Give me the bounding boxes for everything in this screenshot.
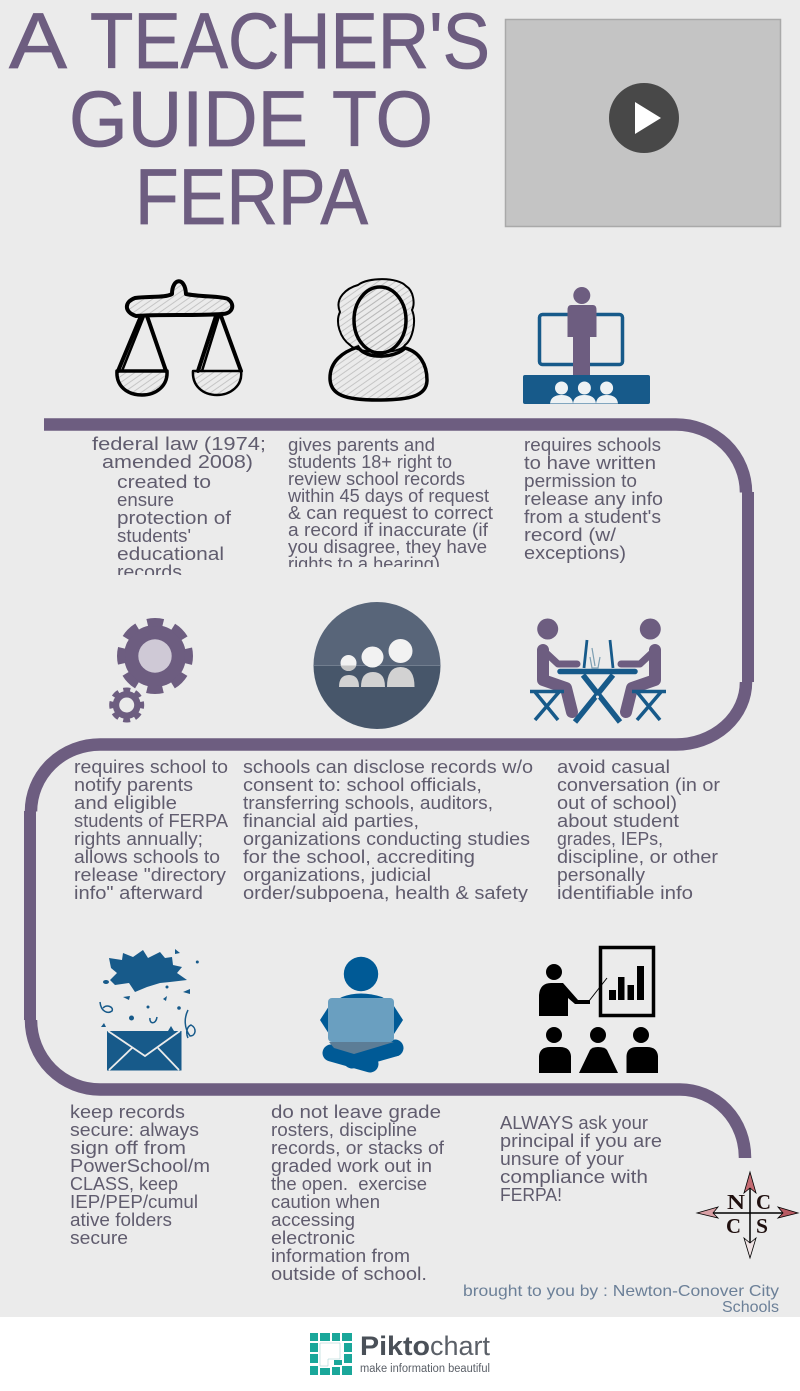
Piktochart logo: Pikto — [360, 1331, 430, 1361]
text: casual conversation: conversation (in or — [557, 775, 720, 795]
text: written permission — [524, 435, 663, 563]
text: disclosure without consent: order/subpoena, health & safety — [243, 883, 528, 903]
text: casual conversation: discipline, or other — [557, 847, 718, 867]
text: parents' rights: you disagree, they have — [288, 537, 487, 557]
text: casual conversation: about student — [557, 811, 679, 831]
icon: NCCS compass logo: C — [726, 1214, 741, 1238]
text: disclosure without consent: schools can disclose records w/o — [243, 757, 533, 777]
text: keep records secure: sign off from — [70, 1138, 186, 1158]
title: TO — [332, 74, 433, 163]
text: annual notification: allows schools to — [74, 847, 220, 867]
icon: NCCS compass logo: S — [756, 1214, 768, 1238]
icon: person with laptop — [320, 957, 403, 1064]
text: disclosure without consent — [243, 757, 533, 903]
text: ask your principal: unsure of your — [500, 1149, 624, 1169]
text: do not leave records out: records, or stacks of — [271, 1138, 445, 1158]
Piktochart logo — [310, 1331, 490, 1375]
text: do not leave records out: electronic — [271, 1228, 355, 1248]
text: written permission: requires schools — [524, 435, 661, 455]
text: annual notification: notify parents — [74, 775, 193, 795]
text: ask your principal: ALWAYS ask your — [500, 1113, 648, 1133]
text: ask your principal: principal if you are — [500, 1131, 662, 1151]
text: parents' rights: students 18+ right to — [288, 452, 452, 472]
text: written permission: to have written — [524, 453, 656, 473]
text: written permission: exceptions) — [524, 543, 626, 563]
text: do not leave records out: graded work out in — [271, 1156, 432, 1176]
icon: NCCS compass logo — [697, 1172, 798, 1258]
text: keep records secure: ative folders — [70, 1210, 172, 1230]
icon: presenter and audience — [539, 948, 658, 1073]
text: casual conversation: avoid casual — [557, 757, 670, 777]
text: federal law: records — [117, 562, 182, 582]
text: federal law: educational — [117, 544, 224, 564]
icon: scales of justice — [117, 281, 241, 395]
text: federal law: students' — [117, 526, 191, 546]
text: keep records secure: CLASS, keep — [70, 1174, 178, 1194]
text: disclosure without consent: organizations, judicial — [243, 865, 431, 885]
text: do not leave records out: the open. exercise — [271, 1174, 427, 1194]
text: disclosure without consent: financial aid parties, — [243, 811, 419, 831]
text: annual notification — [74, 757, 228, 903]
text: keep records secure: PowerSchool/m — [70, 1156, 210, 1176]
text: federal law: protection of — [117, 508, 232, 528]
text: disclosure without consent: transferring schools, auditors, — [243, 793, 493, 813]
icon: NCCS compass logo: C — [756, 1190, 771, 1214]
text: keep records secure: IEP/PEP/cumul — [70, 1192, 198, 1212]
text: annual notification: release "directory — [74, 865, 226, 885]
text: keep records secure: keep records — [70, 1102, 185, 1122]
icon: speaker on stage — [523, 287, 650, 404]
text: written permission: from a student's — [524, 507, 661, 527]
text: annual notification: info" afterward — [74, 883, 203, 903]
text: disclosure without consent: for the school, accrediting — [243, 847, 475, 867]
text: ask your principal: compliance with — [500, 1167, 648, 1187]
text: keep records secure: secure: always — [70, 1120, 199, 1140]
text: casual conversation — [557, 757, 720, 903]
Piktochart logo: make information beautiful — [360, 1363, 490, 1375]
text: do not leave records out: outside of school. — [271, 1264, 427, 1284]
text: do not leave records out: caution when — [271, 1192, 380, 1212]
text: federal law: amended 2008) — [102, 452, 253, 472]
video placeholder — [506, 20, 780, 226]
text: written permission: permission to — [524, 471, 637, 491]
text: annual notification: and eligible — [74, 793, 177, 813]
icon: person with wig — [330, 279, 427, 400]
text: do not leave records out — [271, 1102, 445, 1284]
title — [9, 0, 490, 241]
text: keep records secure: secure — [70, 1228, 128, 1248]
text: parents' rights: a record if inaccurate (if — [288, 520, 489, 540]
text: parents' rights: review school records — [288, 469, 465, 489]
text: annual notification: students of FERPA — [74, 811, 228, 831]
text: annual notification: requires school to — [74, 757, 228, 777]
text: casual conversation: grades, IEPs, — [557, 829, 663, 849]
text: casual conversation: personally — [557, 865, 645, 885]
text: parents' rights: within 45 days of request — [287, 486, 489, 506]
text: do not leave records out: accessing — [271, 1210, 355, 1230]
text: parents' rights: gives parents and — [288, 435, 435, 455]
text: written permission: record (w/ — [524, 525, 616, 545]
text: written permission: release any info — [524, 489, 663, 509]
text: do not leave records out: do not leave grade — [271, 1102, 441, 1122]
footer band — [0, 1317, 800, 1391]
text: parents' rights — [287, 435, 493, 574]
text: disclosure without consent: organizations conducting studies — [243, 829, 530, 849]
credit line: brought to you by : Newton-Conover City — [463, 1283, 779, 1300]
text: do not leave records out: information from — [271, 1246, 410, 1266]
text: casual conversation: out of school) — [557, 793, 677, 813]
text: ask your principal — [500, 1113, 662, 1205]
timeline path — [24, 424, 754, 1158]
text: annual notification: rights annually; — [74, 829, 203, 849]
text: casual conversation: identifiable info — [557, 883, 693, 903]
text: federal law: ensure — [117, 490, 174, 510]
credit line — [463, 1283, 779, 1316]
text: parents' rights: & can request to correct — [288, 503, 493, 523]
text: federal law: created to — [117, 472, 211, 492]
text: keep records secure — [70, 1102, 210, 1248]
title: FERPA — [135, 152, 368, 241]
text: federal law — [92, 434, 266, 582]
Piktochart logo: chart — [430, 1331, 490, 1361]
text: do not leave records out: rosters, discipline — [271, 1120, 417, 1140]
icon: two people at a table — [530, 618, 666, 722]
text: disclosure without consent: consent to: school officials, — [243, 775, 482, 795]
text: ask your principal: FERPA! — [500, 1185, 562, 1205]
title: GUIDE — [69, 74, 308, 163]
text: federal law: federal law (1974; — [92, 434, 266, 454]
icon: NCCS compass logo: N — [727, 1190, 745, 1214]
credit line: Schools — [722, 1299, 779, 1316]
icon: envelope with burst — [100, 949, 199, 1070]
icon: family disc — [314, 602, 440, 729]
icon: gears — [111, 622, 189, 720]
text: parents' rights: rights to a hearing) — [288, 554, 440, 574]
